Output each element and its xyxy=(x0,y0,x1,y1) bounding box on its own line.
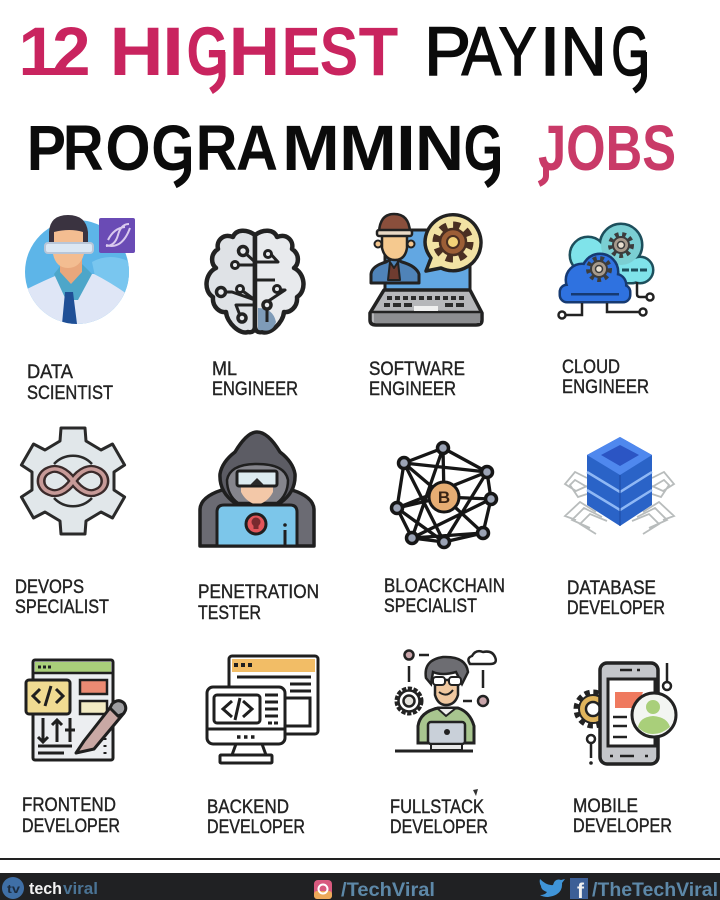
icon: DNA tile xyxy=(99,218,135,253)
icon: bitcoin network xyxy=(392,442,496,548)
label: fullstack developer xyxy=(390,796,488,838)
title line 2: P xyxy=(27,112,66,184)
title line 1: P xyxy=(424,13,471,90)
title line 1: H xyxy=(110,13,163,90)
title line 2: N xyxy=(415,112,464,184)
panel: backend developer xyxy=(207,656,318,838)
icon: engineer on laptop xyxy=(370,214,482,325)
panel: software engineer xyxy=(369,214,482,400)
label: frontend developer: DEVELOPER xyxy=(22,815,120,837)
panel: mobile developer xyxy=(573,663,676,837)
icon: circuit brain xyxy=(207,231,303,332)
footer brand: techviral: tech xyxy=(29,879,62,898)
title line 2: M xyxy=(339,112,397,184)
label: ML engineer xyxy=(212,358,298,400)
label: backend developer xyxy=(207,796,305,838)
label: ML engineer: ENGINEER xyxy=(212,378,298,400)
label: mobile developer xyxy=(573,795,672,837)
label: mobile developer: MOBILE xyxy=(573,795,638,817)
label: ML engineer: ML xyxy=(212,358,237,380)
title line 2 xyxy=(27,112,676,185)
title line 1: 1 xyxy=(18,13,57,90)
label: data scientist xyxy=(27,361,113,404)
label: frontend developer: FRONTEND xyxy=(22,794,116,816)
label: cloud engineer: CLOUD xyxy=(562,356,620,378)
title line 1: G xyxy=(611,13,649,90)
label: database developer xyxy=(567,577,665,619)
title line 1: E xyxy=(282,13,320,90)
title line 2: A xyxy=(236,112,278,184)
icon: hooded hacker xyxy=(200,432,314,546)
label: fullstack developer: DEVELOPER xyxy=(390,816,488,838)
label: database developer: DEVELOPER xyxy=(567,597,665,619)
panel: blockchain specialist xyxy=(384,442,505,617)
title line 1: I xyxy=(162,13,184,90)
panel: devops specialist xyxy=(15,428,125,618)
title line 1: G xyxy=(186,13,228,90)
icon: engineer figure xyxy=(371,214,419,283)
label: backend developer: DEVELOPER xyxy=(207,816,305,838)
footer bar xyxy=(0,873,720,900)
title line 2: G xyxy=(151,112,194,184)
title line 1: H xyxy=(229,13,280,90)
title line 2: O xyxy=(106,112,150,184)
label: cloud engineer: ENGINEER xyxy=(562,376,649,398)
panel: cloud engineer xyxy=(558,225,654,398)
label: frontend developer xyxy=(22,794,120,837)
title line 2: G xyxy=(464,112,503,184)
icon: phone with profile xyxy=(577,663,676,765)
label: fullstack developer: FULLSTACK xyxy=(390,796,484,818)
title line 1: I xyxy=(540,13,560,90)
label: devops specialist xyxy=(15,576,109,618)
label: blockchain specialist xyxy=(384,575,505,617)
panel: frontend developer xyxy=(22,660,126,837)
icon: scientist with visor xyxy=(25,215,135,330)
label: software engineer: ENGINEER xyxy=(369,378,456,400)
label: mobile developer: DEVELOPER xyxy=(573,815,672,837)
panel: penetration tester xyxy=(198,432,319,624)
label: penetration tester xyxy=(198,581,319,624)
title line 1: A xyxy=(462,13,501,90)
panel: database developer xyxy=(565,437,674,619)
panel: fullstack developer xyxy=(390,650,496,838)
icon: developer at laptop xyxy=(395,650,496,751)
icon: gear with infinity xyxy=(21,428,125,534)
label: blockchain specialist: BLOACKCHAIN xyxy=(384,575,505,597)
footer brand: techviral xyxy=(2,877,98,899)
icon: monitor and browser window xyxy=(207,656,318,763)
label: software engineer xyxy=(369,358,465,400)
title line 2: M xyxy=(282,112,340,184)
title line 2: R xyxy=(63,112,104,184)
title line 1: S xyxy=(320,13,358,90)
label: penetration tester: PENETRATION xyxy=(198,581,319,603)
title line 1: Y xyxy=(499,13,537,90)
footer brand: techviral: tv xyxy=(7,882,20,896)
label: penetration tester: TESTER xyxy=(198,602,261,624)
label: data scientist: DATA xyxy=(27,361,73,383)
title line 1: N xyxy=(561,13,606,90)
label: devops specialist: DEVOPS xyxy=(15,576,84,598)
decoration specks xyxy=(473,789,478,796)
label: database developer: DATABASE xyxy=(567,577,656,599)
label: blockchain specialist: SPECIALIST xyxy=(384,595,477,617)
icon: web window and pencil xyxy=(26,660,126,760)
title line 2: I xyxy=(396,112,416,184)
footer: twitter and facebook xyxy=(540,878,718,900)
title line 1: 2 xyxy=(52,13,91,90)
label: devops specialist: SPECIALIST xyxy=(15,596,109,618)
title line 1: T xyxy=(359,13,398,90)
label: data scientist: SCIENTIST xyxy=(27,382,113,404)
panel: data scientist xyxy=(25,215,135,404)
title xyxy=(18,13,676,185)
icon: speech bubble gear xyxy=(425,215,481,271)
label: software engineer: SOFTWARE xyxy=(369,358,465,380)
footer brand: techviral: viral xyxy=(63,879,98,898)
icon: clouds with gears xyxy=(558,225,654,318)
title line 2: JOBS xyxy=(538,112,676,184)
label: backend developer: BACKEND xyxy=(207,796,289,818)
title line 2: R xyxy=(196,112,237,184)
panel: ML engineer xyxy=(207,231,303,400)
title line 1 xyxy=(18,13,649,91)
label: cloud engineer xyxy=(562,356,649,398)
icon: server stack xyxy=(565,437,674,534)
icon: bitcoin network: B xyxy=(438,488,450,507)
